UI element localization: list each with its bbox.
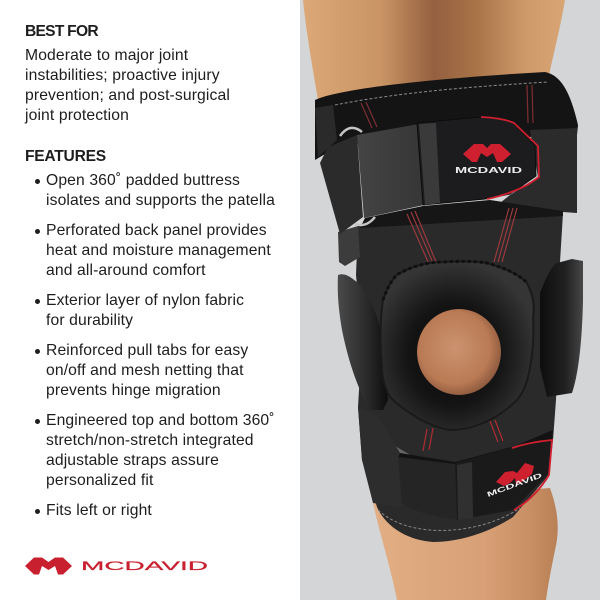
feature: straps: adjustable straps assure xyxy=(46,452,219,468)
top logo mark xyxy=(463,144,511,162)
ring buckles xyxy=(340,128,362,136)
brace lower body xyxy=(356,213,563,542)
feature: pull tabs: prevents hinge migration xyxy=(46,382,221,398)
bottom velcro left xyxy=(358,407,402,507)
red stitch lines xyxy=(361,85,533,451)
side pad left xyxy=(338,274,388,410)
feature: fits: Fits left or right xyxy=(46,502,152,518)
feature: pull tabs: Reinforced pull tabs for easy xyxy=(46,342,248,358)
feature: back panel: heat and moisture management xyxy=(46,242,271,258)
feature: back panel: Perforated back panel provides xyxy=(46,222,267,238)
feature: straps xyxy=(35,412,275,488)
top band xyxy=(315,72,578,160)
feature: nylon xyxy=(35,292,244,328)
top strap xyxy=(357,124,424,218)
bottom brand: MCDAVID xyxy=(486,472,543,499)
logo: McDavid footer: MCDAVID xyxy=(81,559,209,573)
feature: back panel xyxy=(35,222,271,278)
left band tab xyxy=(315,105,337,157)
velcro left xyxy=(320,135,363,234)
red trim bottom xyxy=(512,440,552,510)
logo: McDavid footer xyxy=(25,558,209,574)
feature: patella: isolates and supports the patella xyxy=(46,192,275,208)
photo background xyxy=(300,0,600,600)
heading: features: FEATURES xyxy=(25,148,106,165)
patella opening xyxy=(417,309,501,395)
heading: best for: BEST FOR xyxy=(25,23,98,40)
bullet list: features xyxy=(35,172,275,518)
text block: best for description: joint protection xyxy=(25,106,129,124)
feature: pull tabs xyxy=(35,342,248,398)
lower panel shadow under strap xyxy=(360,200,563,228)
feature: pull tabs: on/off and mesh netting that xyxy=(46,362,244,378)
side strap left xyxy=(338,226,360,266)
top band stitching xyxy=(335,82,548,105)
feature: straps: Engineered top and bottom 360˚ xyxy=(46,412,275,428)
feature: back panel: and all-around comfort xyxy=(46,262,206,278)
upper leg xyxy=(303,0,565,100)
feature: patella xyxy=(35,172,275,208)
side pad right xyxy=(540,259,583,397)
lower leg xyxy=(373,488,558,600)
velcro right xyxy=(500,128,577,213)
text block: best for description: prevention; and post-surgical xyxy=(25,86,230,104)
bottom strap plate xyxy=(455,440,552,520)
text block: best for description xyxy=(24,46,230,124)
buttress xyxy=(381,261,534,430)
buttress stitched edge xyxy=(383,261,527,300)
feature: patella: Open 360˚ padded buttress xyxy=(46,172,240,188)
feature: nylon: Exterior layer of nylon fabric xyxy=(46,292,244,308)
top strap logo plate xyxy=(417,117,536,205)
red trim top xyxy=(481,117,539,199)
text block: best for description: instabilities; proactive injury xyxy=(25,66,220,84)
bottom stitching xyxy=(378,508,520,530)
feature: nylon: for durability xyxy=(46,312,133,328)
bottom logo mark xyxy=(496,463,534,486)
feature: straps: personalized fit xyxy=(46,472,153,488)
bottom strap xyxy=(398,457,457,520)
bottom velcro top edge xyxy=(398,430,553,465)
text block: best for description: Moderate to major joint xyxy=(25,46,188,64)
top brand: MCDAVID xyxy=(455,166,522,175)
feature: straps: stretch/non-stretch integrated xyxy=(46,432,254,448)
